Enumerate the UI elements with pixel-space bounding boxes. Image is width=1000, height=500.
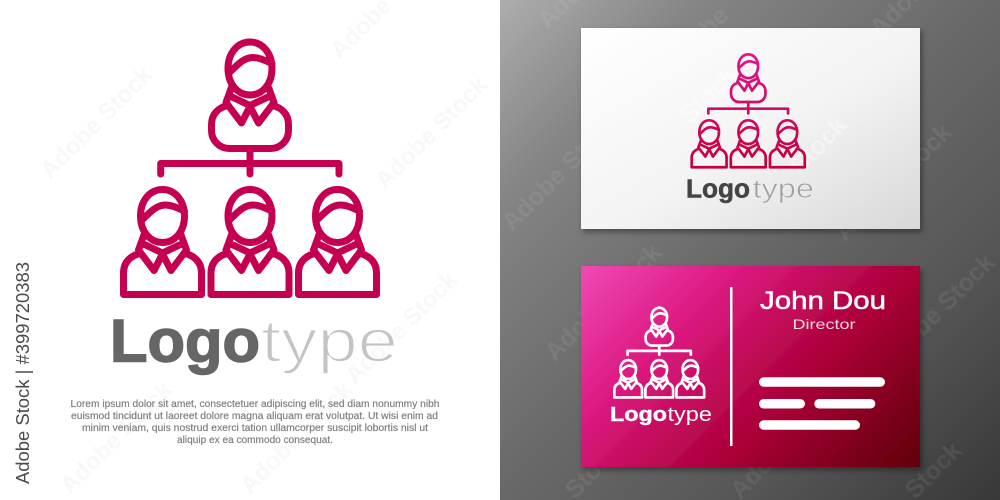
text block: vertical stock credit: Adobe Stock | #399720383 — [13, 262, 33, 484]
text block: lorem ipsum: Lorem ipsum dolor sit amet, consectetuer adipiscing elit, sed diam nonummy nibh — [70, 398, 440, 410]
panel: white business card — [581, 28, 920, 229]
panel: right grey background: Adobe Stock — [496, 108, 624, 236]
text block: lorem ipsum: minim veniam, quis nostrud exerci tation ullamcorper suscipit lobortis nisl ut — [82, 422, 428, 434]
panel: left white logo area: Adobe Stock — [340, 266, 463, 389]
divider line — [730, 287, 732, 446]
heading: magenta card logotype: Logo — [610, 404, 667, 426]
placeholder text bars — [759, 377, 885, 430]
text block: lorem ipsum: euismod tincidunt ut laoreet dolore magna aliquam erat volutpat. Ut wisi enim ad — [71, 410, 438, 422]
panel: left white logo area: Adobe Stock — [35, 61, 158, 184]
icon: card hierarchy in gradient — [692, 54, 805, 167]
text: name: John Dou — [760, 287, 886, 315]
panel: right grey background: Adobe Stock — [829, 118, 957, 246]
panel: right grey background: Adobe Stock — [872, 248, 1000, 376]
heading: main logotype — [110, 308, 398, 374]
heading: magenta card logotype — [610, 404, 712, 426]
panel: left white logo area: Adobe Stock — [370, 71, 493, 194]
panel: right grey background: Adobe Stock — [539, 238, 667, 366]
panel: white business card: Stock — [674, 61, 742, 129]
panel: left white logo area: Adobe Stock — [55, 376, 178, 499]
heading: card logotype: type — [752, 176, 814, 204]
text: job title: Director — [792, 316, 856, 332]
text block: lorem ipsum — [70, 398, 440, 446]
heading: card logotype: Logo — [686, 176, 750, 204]
heading: main logotype: Logo — [110, 308, 260, 374]
icon: main organisation hierarchy — [124, 42, 376, 294]
panel: white business card: Stock — [784, 111, 852, 179]
heading: main logotype: type — [261, 308, 398, 374]
panel: left white logo area — [0, 0, 500, 500]
icon: white card hierarchy — [614, 308, 704, 397]
panel: left white logo area: Adobe Stock — [235, 376, 358, 499]
panel: right grey background: Adobe — [659, 1, 734, 76]
heading: card logotype — [686, 176, 814, 204]
text block: lorem ipsum: aliquip ex ea commodo consequat. — [177, 434, 333, 446]
panel: magenta business card — [581, 266, 920, 467]
heading: magenta card logotype: type — [668, 404, 712, 426]
panel: right grey background — [496, 0, 1000, 500]
